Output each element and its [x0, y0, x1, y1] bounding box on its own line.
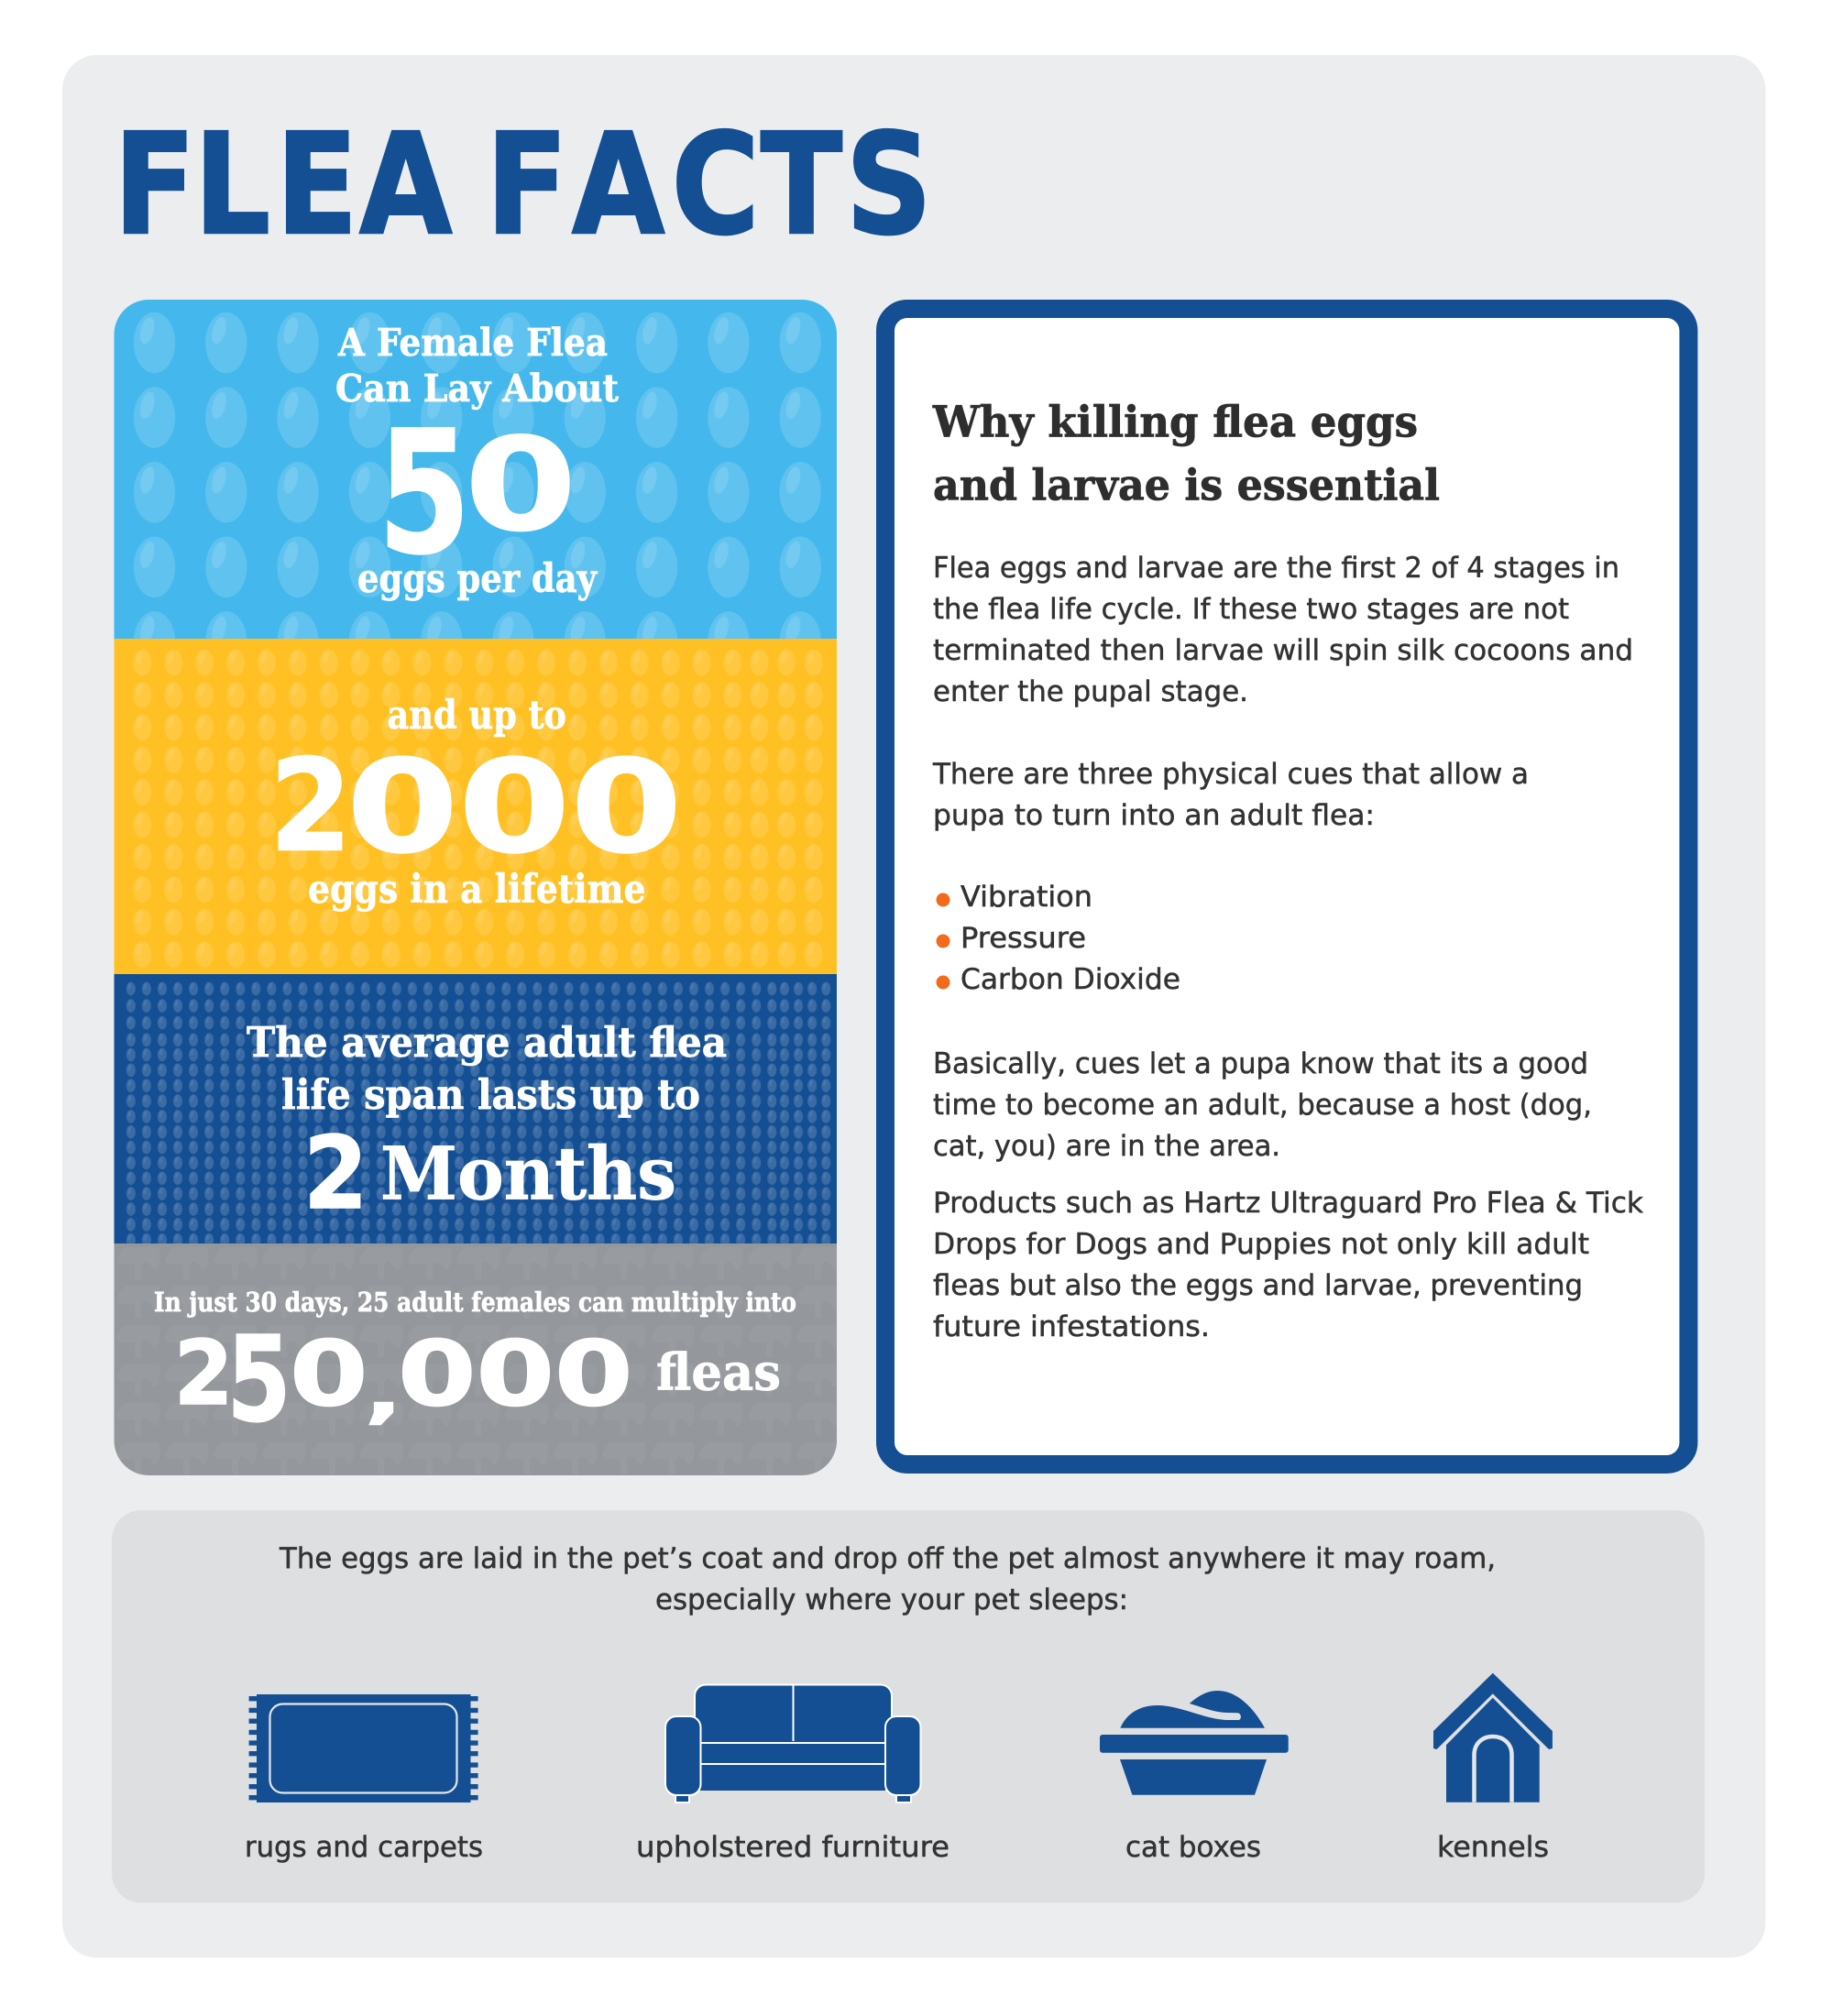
stat band: eggs per day: eggs per day: [357, 556, 598, 602]
bullet list: cues: Vibration: [960, 881, 1092, 914]
stat band: adult life span: Months: [380, 1131, 676, 1217]
stat band: adult life span: [114, 974, 838, 1244]
label: cat boxes: cat boxes: [1125, 1831, 1261, 1864]
stat band: adult life span: The average adult flea: [247, 1018, 727, 1067]
stat band: eggs in a lifetime: eggs in a lifetime: [308, 867, 645, 913]
bullet list: cues: [937, 881, 1180, 996]
bullet list: cues: Pressure: [960, 922, 1086, 955]
stat band: eggs per day: [114, 300, 838, 639]
stat band: eggs in a lifetime: [114, 639, 838, 974]
text block: three cues: There are three physical cues that allow a: [932, 758, 1529, 791]
title: FLEA FACTS: [114, 104, 932, 266]
icon: cat box: [1100, 1691, 1289, 1795]
text block: three cues: pupa to turn into an adult flea:: [933, 799, 1375, 832]
text block: products: fleas but also the eggs and larvae, preventing: [933, 1269, 1583, 1302]
panel: where eggs are laid: [112, 1510, 1705, 1902]
stat band: 250,000 fleas: 5: [227, 1312, 291, 1449]
text block: products: future infestations.: [933, 1310, 1210, 1343]
stat band: eggs in a lifetime: 000: [346, 733, 682, 882]
text block: life cycle: the flea life cycle. If these two stages are not: [933, 593, 1569, 626]
panel: why killing flea eggs: [885, 309, 1688, 1464]
stat band: eggs per day: 0: [465, 411, 576, 560]
stat band: eggs per day: 5: [378, 395, 471, 593]
icon: rug: [249, 1694, 478, 1802]
bullet list: cues: Carbon Dioxide: [960, 963, 1180, 996]
text block: life cycle: [933, 552, 1633, 708]
intro text: especially where your pet sleeps:: [655, 1583, 1128, 1616]
panel heading: [932, 398, 1440, 511]
text block: cues explained: Basically, cues let a pupa know that its a good: [933, 1047, 1588, 1080]
label: kennels: kennels: [1437, 1831, 1549, 1864]
panel heading: and larvae is essential: [933, 460, 1440, 511]
panel: flea statistics column: [114, 300, 838, 1475]
stat band: 250,000 fleas: In just 30 days, 25 adult females can multiply into: [154, 1287, 796, 1318]
text block: life cycle: Flea eggs and larvae are the first 2 of 4 stages in: [933, 552, 1619, 585]
label: upholstered furniture: upholstered furniture: [636, 1831, 949, 1864]
intro text: [279, 1542, 1496, 1616]
text block: life cycle: terminated then larvae will spin silk cocoons and: [933, 634, 1633, 667]
stat band: adult life span: 2: [303, 1115, 368, 1232]
text block: cues explained: time to become an adult, because a host (dog,: [933, 1089, 1592, 1122]
text block: cues explained: [933, 1047, 1592, 1163]
stat band: eggs in a lifetime: and up to: [387, 693, 566, 739]
panel heading: Why killing flea eggs: [932, 398, 1418, 447]
stat band: 250,000 fleas: [114, 1244, 838, 1475]
text block: products: [933, 1187, 1643, 1343]
text block: life cycle: enter the pupal stage.: [933, 675, 1248, 708]
stat band: 250,000 fleas: ,: [365, 1353, 402, 1430]
icon: kennel: [1433, 1673, 1553, 1802]
stat band: 250,000 fleas: 2: [174, 1322, 233, 1425]
stat band: adult life span: life span lasts up to: [281, 1070, 700, 1119]
stat band: 250,000 fleas: 0: [290, 1322, 368, 1427]
stat band: eggs per day: Can Lay About: [335, 367, 619, 411]
text block: products: Drops for Dogs and Puppies not only kill adult: [933, 1228, 1589, 1261]
text block: products: Products such as Hartz Ultraguard Pro Flea & Tick: [933, 1187, 1643, 1220]
stat band: eggs in a lifetime: 2: [269, 731, 352, 881]
text block: cues explained: cat, you) are in the area.: [933, 1130, 1280, 1163]
icon: sofa: [665, 1684, 920, 1802]
stat band: 250,000 fleas: fleas: [656, 1342, 781, 1402]
label: rugs and carpets: rugs and carpets: [245, 1831, 483, 1864]
intro text: The eggs are laid in the pet’s coat and drop off the pet almost anywhere it may roam,: [279, 1542, 1496, 1575]
stat band: eggs per day: A Female Flea: [337, 321, 608, 365]
stat band: 250,000 fleas: 000: [398, 1322, 632, 1427]
text block: three cues: [932, 758, 1529, 832]
